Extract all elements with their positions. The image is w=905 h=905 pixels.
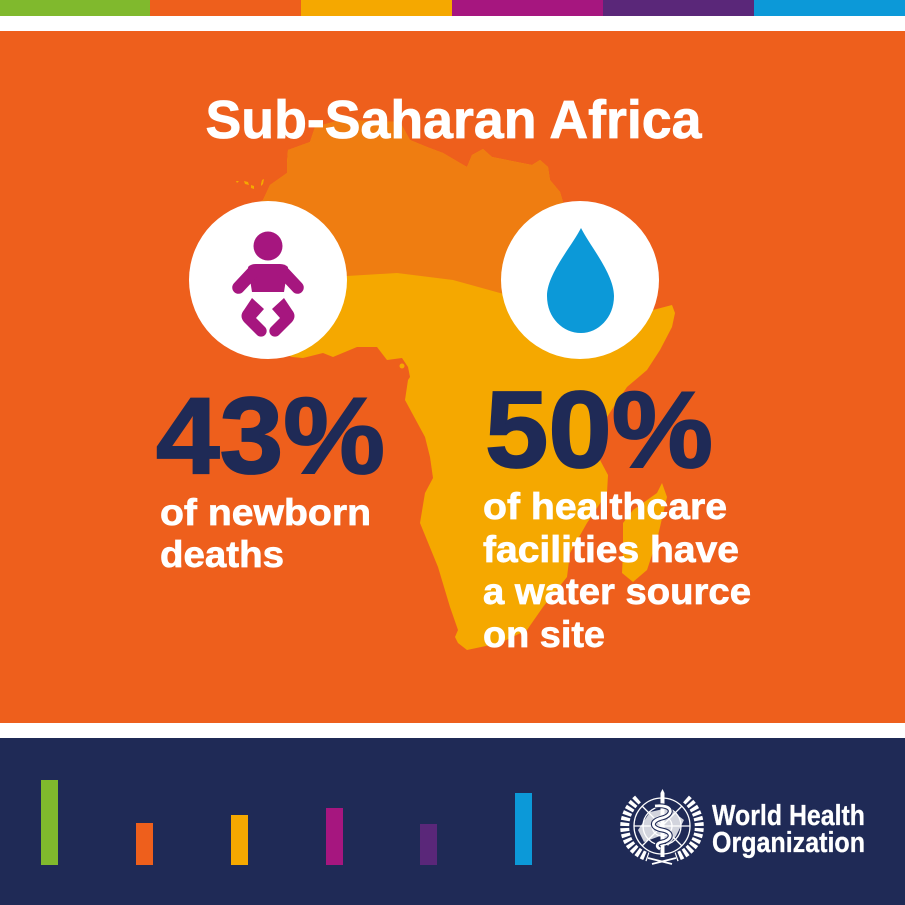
WHO wordmark: World Health	[712, 800, 865, 832]
navy footer	[0, 738, 905, 905]
title: Sub-Saharan Africa	[206, 90, 702, 150]
stat label: newborn deaths	[160, 492, 371, 575]
stat label: healthcare facilities: a water source	[483, 571, 751, 612]
stat label: newborn deaths: of newborn	[160, 492, 371, 533]
icon: water drop	[501, 201, 659, 359]
orange panel background	[0, 31, 905, 723]
stat: 50%: 50%	[485, 369, 713, 491]
WHO wordmark	[712, 800, 865, 859]
stat: 43%: 43%	[156, 375, 385, 497]
stat label: healthcare facilities: of healthcare	[483, 486, 727, 527]
WHO emblem	[625, 789, 699, 864]
map of Africa	[236, 120, 675, 650]
top colour stripe	[0, 0, 905, 16]
stat label: healthcare facilities: facilities have	[483, 529, 739, 570]
WHO wordmark: Organization	[712, 827, 865, 859]
stat label: newborn deaths: deaths	[160, 534, 284, 575]
icon: baby	[189, 201, 347, 359]
stat label: healthcare facilities	[483, 486, 751, 655]
stat label: healthcare facilities: on site	[483, 614, 605, 655]
footer bar chart	[41, 780, 532, 865]
